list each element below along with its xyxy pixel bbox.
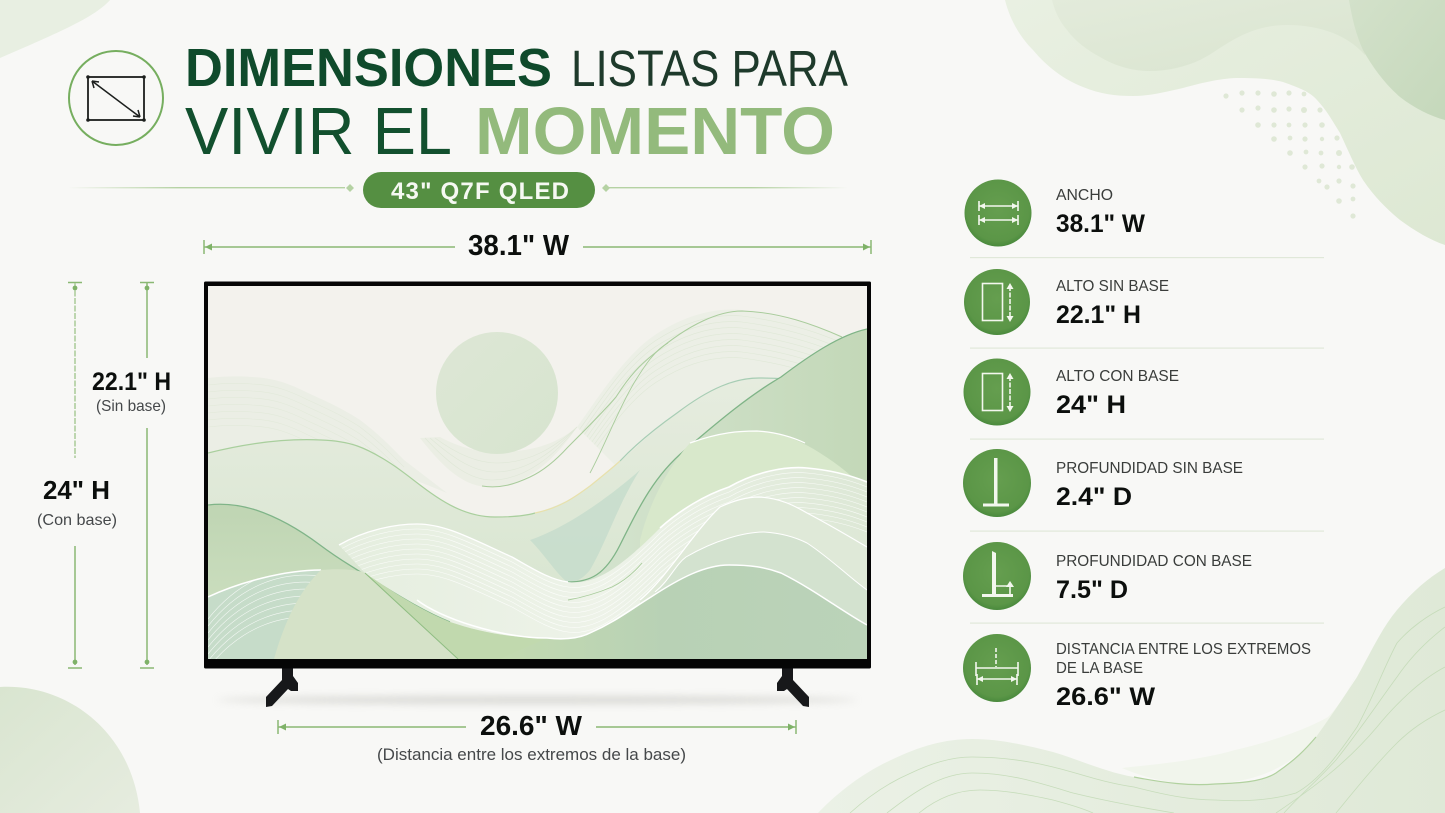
spec row: profundidad con base xyxy=(963,542,1252,610)
icon: screen diagonal xyxy=(69,51,163,145)
subtitle rule: right xyxy=(602,184,848,192)
spec row: alto con base: 24" H xyxy=(1056,391,1126,419)
bottom green band xyxy=(368,574,546,659)
subtitle rule: left xyxy=(68,184,354,192)
spec row: ancho xyxy=(964,180,1145,246)
dimension: base width 26.6 xyxy=(278,710,796,764)
model badge: 43" Q7F QLED xyxy=(391,178,569,205)
spec row: distancia entre extremos xyxy=(963,634,1311,711)
spec row: distancia entre extremos: DE LA BASE xyxy=(1056,660,1143,677)
title: LISTAS PARA xyxy=(571,40,848,97)
white line ribbon xyxy=(339,468,867,639)
spec row: alto sin base: 22.1" H xyxy=(1056,301,1141,329)
decorative dots xyxy=(1223,90,1356,219)
spec row: profundidad sin base xyxy=(963,449,1243,517)
tv screen artwork xyxy=(208,286,867,668)
spec row: alto con base xyxy=(964,358,1179,426)
left hill xyxy=(208,505,357,596)
dimension: height without base xyxy=(92,282,171,668)
tv shadow xyxy=(217,696,857,704)
model badge xyxy=(363,172,595,208)
tv xyxy=(204,282,871,668)
title: MOMENTO xyxy=(475,94,835,169)
decorative corner: top left blob xyxy=(0,0,110,58)
spec row: alto con base: ALTO CON BASE xyxy=(1056,368,1179,385)
spec row: ancho: 38.1" W xyxy=(1056,210,1145,238)
icon: width arrows xyxy=(964,180,1032,246)
spec row: profundidad con base: 7.5" D xyxy=(1056,576,1128,604)
dimension: base width 26.6: 26.6" W xyxy=(480,710,583,741)
spec row: profundidad sin base: PROFUNDIDAD SIN BASE xyxy=(1056,460,1243,477)
spec row: distancia entre extremos: 26.6" W xyxy=(1056,683,1155,711)
dimension: height with base: 24" H xyxy=(43,475,110,505)
dimension: height without base: 22.1" H xyxy=(92,368,171,396)
spec row: alto sin base: ALTO SIN BASE xyxy=(1056,278,1169,295)
spec row: profundidad con base: PROFUNDIDAD CON BASE xyxy=(1056,553,1252,570)
bottom hill xyxy=(590,566,867,659)
light green highlight xyxy=(651,432,850,536)
spec row: alto sin base xyxy=(964,269,1169,335)
icon: base width xyxy=(963,634,1031,702)
icon: depth without base xyxy=(963,449,1031,517)
title: VIVIR EL xyxy=(185,94,452,169)
spec row: ancho: ANCHO xyxy=(1056,187,1113,204)
title xyxy=(185,39,848,169)
decorative corner: bottom right wave xyxy=(818,568,1445,813)
icon: height with base xyxy=(964,358,1030,426)
icon: height without base xyxy=(964,269,1030,335)
spec row: profundidad sin base: 2.4" D xyxy=(1056,483,1132,511)
decorative corner: bottom left blob xyxy=(0,687,140,813)
spec row: distancia entre extremos: DISTANCIA ENTRE LOS EXTREMOS xyxy=(1056,641,1311,658)
tv stand: left leg xyxy=(266,666,298,707)
lower left strands xyxy=(208,570,321,659)
dimension: height with base: (Con base) xyxy=(37,512,117,529)
dimension: height without base: (Sin base) xyxy=(96,398,166,415)
teal shadow wedge xyxy=(530,470,640,582)
title: DIMENSIONES xyxy=(185,39,552,98)
dimension: width 38.1 xyxy=(204,230,871,262)
dimension: height with base xyxy=(37,282,117,668)
tv stand: right leg xyxy=(777,666,809,707)
sun circle xyxy=(436,332,558,454)
decorative corner: top right blobs xyxy=(1005,0,1445,245)
dimension: width 38.1: 38.1" W xyxy=(468,230,570,262)
icon: depth with base xyxy=(963,542,1031,610)
dimension: base width 26.6: (Distancia entre los extremos de la base) xyxy=(377,745,686,764)
